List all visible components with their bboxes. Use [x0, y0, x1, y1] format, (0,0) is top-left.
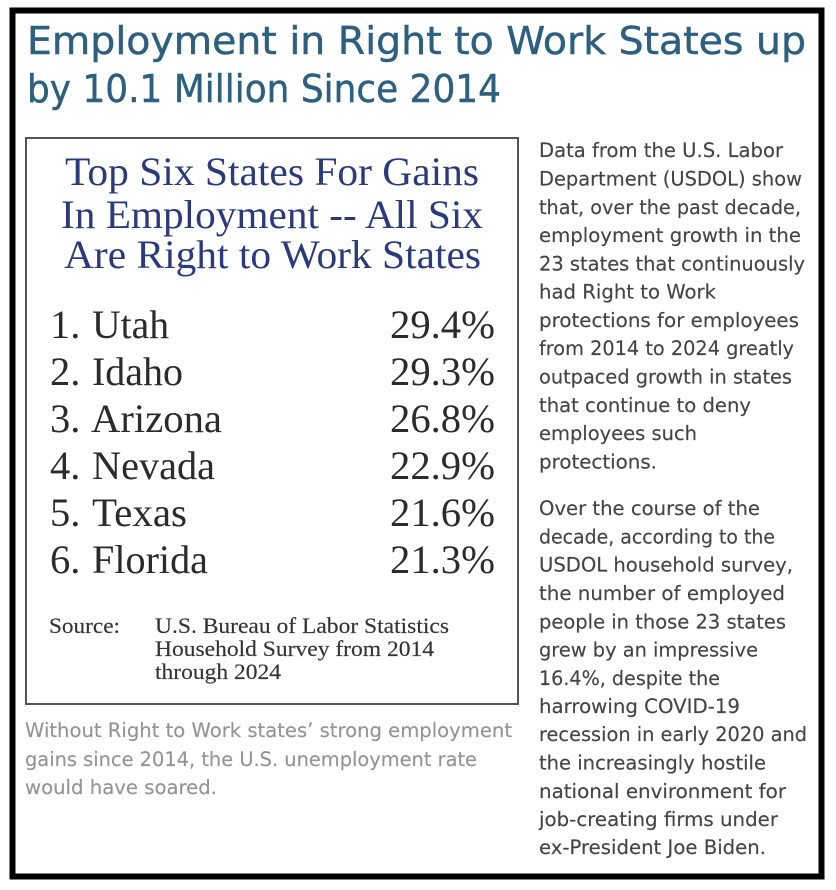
source note: through 2024 — [155, 659, 281, 684]
caption: would have soared. — [25, 776, 217, 799]
ranking row: Utah: Utah — [92, 302, 169, 347]
body paragraph 2: job-creating firms under — [538, 808, 779, 831]
ranking row: Nevada — [50, 443, 495, 488]
body paragraph 1: that, over the past decade, — [539, 196, 801, 219]
body paragraph 1: Data from the U.S. Labor — [539, 139, 784, 162]
body paragraph 1: protections. — [539, 450, 657, 474]
body paragraph 2: the number of employed — [539, 582, 785, 605]
table heading — [61, 149, 483, 277]
body paragraph 1: employees such — [539, 422, 697, 445]
ranking row: Arizona: Arizona — [91, 396, 222, 441]
ranking row: Nevada: 22.9% — [390, 443, 495, 488]
body paragraph 1: that continue to deny — [539, 394, 751, 417]
ranking row: Florida — [50, 537, 495, 582]
body paragraph 2: people in those 23 states — [539, 610, 786, 633]
body paragraph 2: the increasingly hostile — [539, 752, 766, 774]
body paragraph 2: decade, according to the — [539, 525, 775, 548]
body paragraph 1 — [539, 139, 805, 474]
body paragraph 1: had Right to Work — [539, 281, 717, 304]
ranking row: Nevada: Nevada — [92, 443, 215, 488]
body paragraph 1: protections for employees — [539, 309, 799, 332]
body paragraph 1: employment growth in the — [539, 224, 801, 247]
ranking row: Arizona: 3. — [50, 396, 80, 441]
ranking row: Utah: 29.4% — [390, 302, 495, 347]
ranking row: Texas: 21.6% — [390, 490, 495, 535]
source note — [49, 613, 449, 684]
body paragraph 1: Department (USDOL) show — [539, 167, 802, 190]
body paragraph 2 — [538, 497, 807, 859]
ranking row: Idaho — [50, 349, 495, 394]
ranking row: Idaho: Idaho — [92, 349, 183, 394]
title: Employment in Right to Work States up — [27, 19, 806, 63]
table heading: Are Right to Work States — [64, 232, 481, 277]
body paragraph 1: outpaced growth in states — [539, 365, 792, 388]
ranking row: Arizona — [50, 396, 495, 441]
body paragraph 1: from 2014 to 2024 greatly — [539, 337, 794, 360]
table heading: In Employment -- All Six — [61, 192, 483, 237]
source note: U.S. Bureau of Labor Statistics — [155, 613, 449, 638]
body paragraph 2: grew by an impressive — [539, 639, 758, 662]
ranking row: Texas: Texas — [92, 490, 187, 535]
caption: Without Right to Work states’ strong employment — [25, 719, 512, 742]
caption — [25, 719, 512, 799]
source note: Household Survey from 2014 — [155, 636, 434, 661]
ranking row: Florida: Florida — [92, 537, 208, 582]
body paragraph 2: Over the course of the — [539, 497, 760, 520]
source note: Source: — [49, 613, 120, 638]
ranking row: Idaho: 2. — [50, 349, 80, 394]
ranking row: Utah: 1. — [50, 302, 80, 347]
body paragraph 2: recession in early 2020 and — [539, 723, 807, 746]
body paragraph 2: 16.4%, despite the — [539, 667, 720, 690]
body paragraph 2: ex-President Joe Biden. — [539, 836, 766, 859]
ranking row: Florida: 6. — [50, 537, 80, 582]
body paragraph 2: USDOL household survey, — [539, 554, 793, 577]
table heading: Top Six States For Gains — [65, 149, 479, 194]
ranking row: Idaho: 29.3% — [390, 349, 495, 394]
ranking row: Utah — [50, 302, 495, 347]
caption: gains since 2014, the U.S. unemployment rate — [25, 748, 477, 771]
title — [27, 19, 806, 111]
ranking row: Texas — [50, 490, 495, 535]
title: by 10.1 Million Since 2014 — [27, 67, 501, 111]
ranking row: Arizona: 26.8% — [390, 396, 495, 441]
panel: top six states table — [26, 138, 518, 704]
ranking row: Florida: 21.3% — [390, 537, 495, 582]
body paragraph 2: harrowing COVID-19 — [539, 695, 740, 718]
ranking row: Nevada: 4. — [50, 443, 80, 488]
body paragraph 2: national environment for — [539, 780, 787, 803]
ranking row: Texas: 5. — [50, 490, 80, 535]
body paragraph 1: 23 states that continuously — [539, 252, 805, 275]
